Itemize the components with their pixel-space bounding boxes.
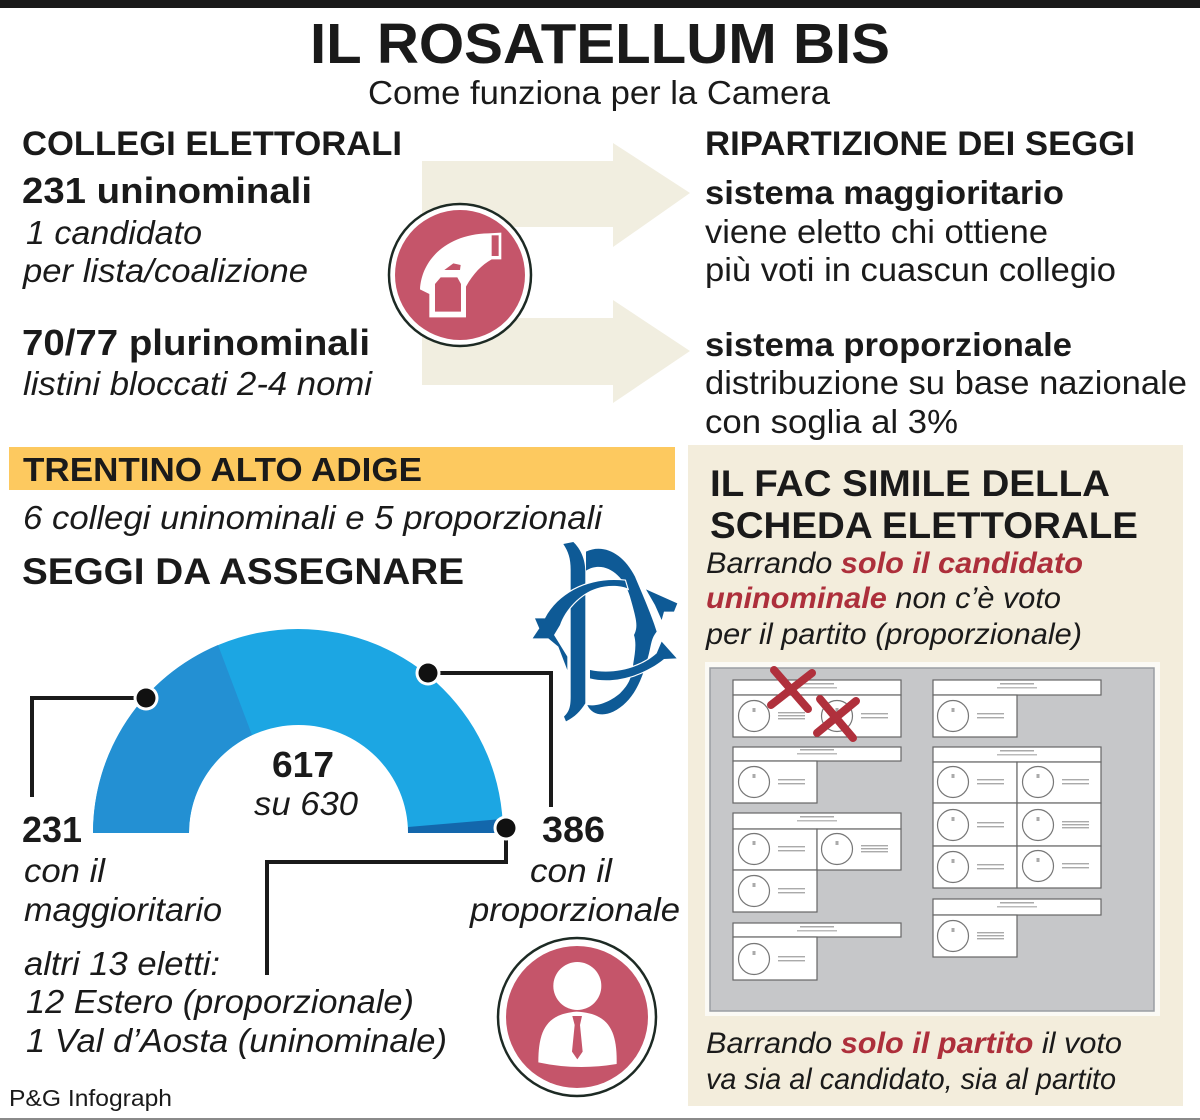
arrow: maggioritario bbox=[422, 143, 690, 247]
maggioritario description: viene eletto chi ottiene bbox=[705, 213, 1048, 250]
panel: collegi elettorali bbox=[22, 125, 402, 402]
other elected note: 1 Val d’Aosta (uninominale) bbox=[26, 1022, 447, 1059]
heading: fac simile: IL FAC SIMILE DELLA bbox=[710, 463, 1110, 504]
icon: Camera dei Deputati monogram bbox=[533, 542, 677, 721]
value 231: 231 bbox=[22, 809, 82, 850]
label proporzionale: proporzionale bbox=[469, 891, 680, 928]
heading: seggi da assegnare: SEGGI DA ASSEGNARE bbox=[22, 551, 464, 592]
other elected note: 12 Estero (proporzionale) bbox=[26, 983, 414, 1020]
note: only candidate: per il partito (proporzionale) bbox=[705, 618, 1082, 651]
title: IL ROSATELLUM BIS bbox=[310, 12, 890, 76]
note: only candidate: uninominale non c’è voto bbox=[706, 582, 1061, 615]
collegi Trentino text: 6 collegi uninominali e 5 proporzionali bbox=[23, 499, 604, 536]
maggioritario description bbox=[705, 213, 1116, 288]
banner: Trentino Alto Adige: TRENTINO ALTO ADIGE bbox=[23, 451, 422, 488]
uninominali description bbox=[22, 214, 308, 289]
red cross: candidate bbox=[771, 670, 812, 709]
banner: Trentino Alto Adige bbox=[9, 447, 675, 490]
proporzionale description: distribuzione su base nazionale bbox=[705, 364, 1187, 401]
label maggioritario: con il bbox=[24, 852, 107, 889]
label maggioritario: maggioritario bbox=[24, 891, 222, 928]
chart: seats half donut bbox=[93, 629, 503, 833]
uninominali count: 231 uninominali bbox=[22, 170, 312, 211]
arrow: proporzionale bbox=[422, 300, 690, 403]
credit: P&G Infograph bbox=[9, 1085, 172, 1111]
other elected note bbox=[24, 945, 447, 1059]
note: only party: Barrando solo il partito il voto bbox=[706, 1027, 1122, 1060]
segment: proporzionale 386 bbox=[93, 629, 503, 833]
ballot blocks left column bbox=[733, 680, 901, 980]
plurinominali count: 70/77 plurinominali bbox=[22, 322, 370, 363]
proporzionale description: con soglia al 3% bbox=[705, 403, 958, 440]
ballot sample bbox=[705, 662, 1160, 1016]
leader line: 386 bbox=[416, 660, 551, 807]
uninominali description: 1 candidato bbox=[26, 214, 202, 251]
value 386: 386 bbox=[542, 809, 605, 850]
panel: ripartizione dei seggi bbox=[705, 125, 1187, 440]
subtitle: Come funziona per la Camera bbox=[368, 74, 831, 111]
proporzionale description bbox=[705, 364, 1187, 440]
label proporzionale bbox=[469, 852, 680, 928]
label maggioritario bbox=[24, 852, 222, 928]
heading: fac simile bbox=[710, 463, 1138, 546]
heading: collegi elettorali: COLLEGI ELETTORALI bbox=[22, 125, 402, 163]
uninominali description: per lista/coalizione bbox=[22, 252, 308, 289]
ballot symbols bbox=[738, 683, 1089, 974]
maggioritario description: più voti in cuascun collegio bbox=[705, 251, 1116, 288]
heading: fac simile: SCHEDA ELETTORALE bbox=[710, 505, 1138, 546]
note: only candidate: Barrando solo il candidato bbox=[706, 547, 1083, 580]
ballot blocks right column bbox=[933, 680, 1101, 957]
bottom rule bbox=[0, 1118, 1200, 1120]
note: only party bbox=[706, 1027, 1122, 1096]
label proporzionale: con il bbox=[530, 852, 614, 889]
leader line: altri 13 bbox=[267, 816, 518, 975]
su 630: su 630 bbox=[254, 785, 359, 822]
heading: ripartizione: RIPARTIZIONE DEI SEGGI bbox=[705, 125, 1135, 163]
segment: altri 13 bbox=[408, 819, 503, 833]
panel: fac simile bbox=[688, 445, 1183, 1106]
top black bar bbox=[0, 0, 1200, 8]
sistema maggioritario: sistema maggioritario bbox=[705, 174, 1064, 211]
note: only party: va sia al candidato, sia al partito bbox=[706, 1063, 1116, 1096]
plurinominali description: listini bloccati 2-4 nomi bbox=[23, 365, 374, 402]
total 617: 617 bbox=[272, 744, 334, 785]
note: only candidate bbox=[705, 547, 1083, 651]
icon: ballot box bbox=[389, 204, 531, 346]
icon: candidate person bbox=[498, 938, 656, 1096]
leader line: 231 bbox=[32, 686, 158, 797]
red cross: party bbox=[817, 699, 856, 738]
other elected note: altri 13 eletti: bbox=[24, 945, 220, 982]
sistema proporzionale: sistema proporzionale bbox=[705, 326, 1072, 363]
segment: maggioritario 231 bbox=[93, 645, 252, 833]
